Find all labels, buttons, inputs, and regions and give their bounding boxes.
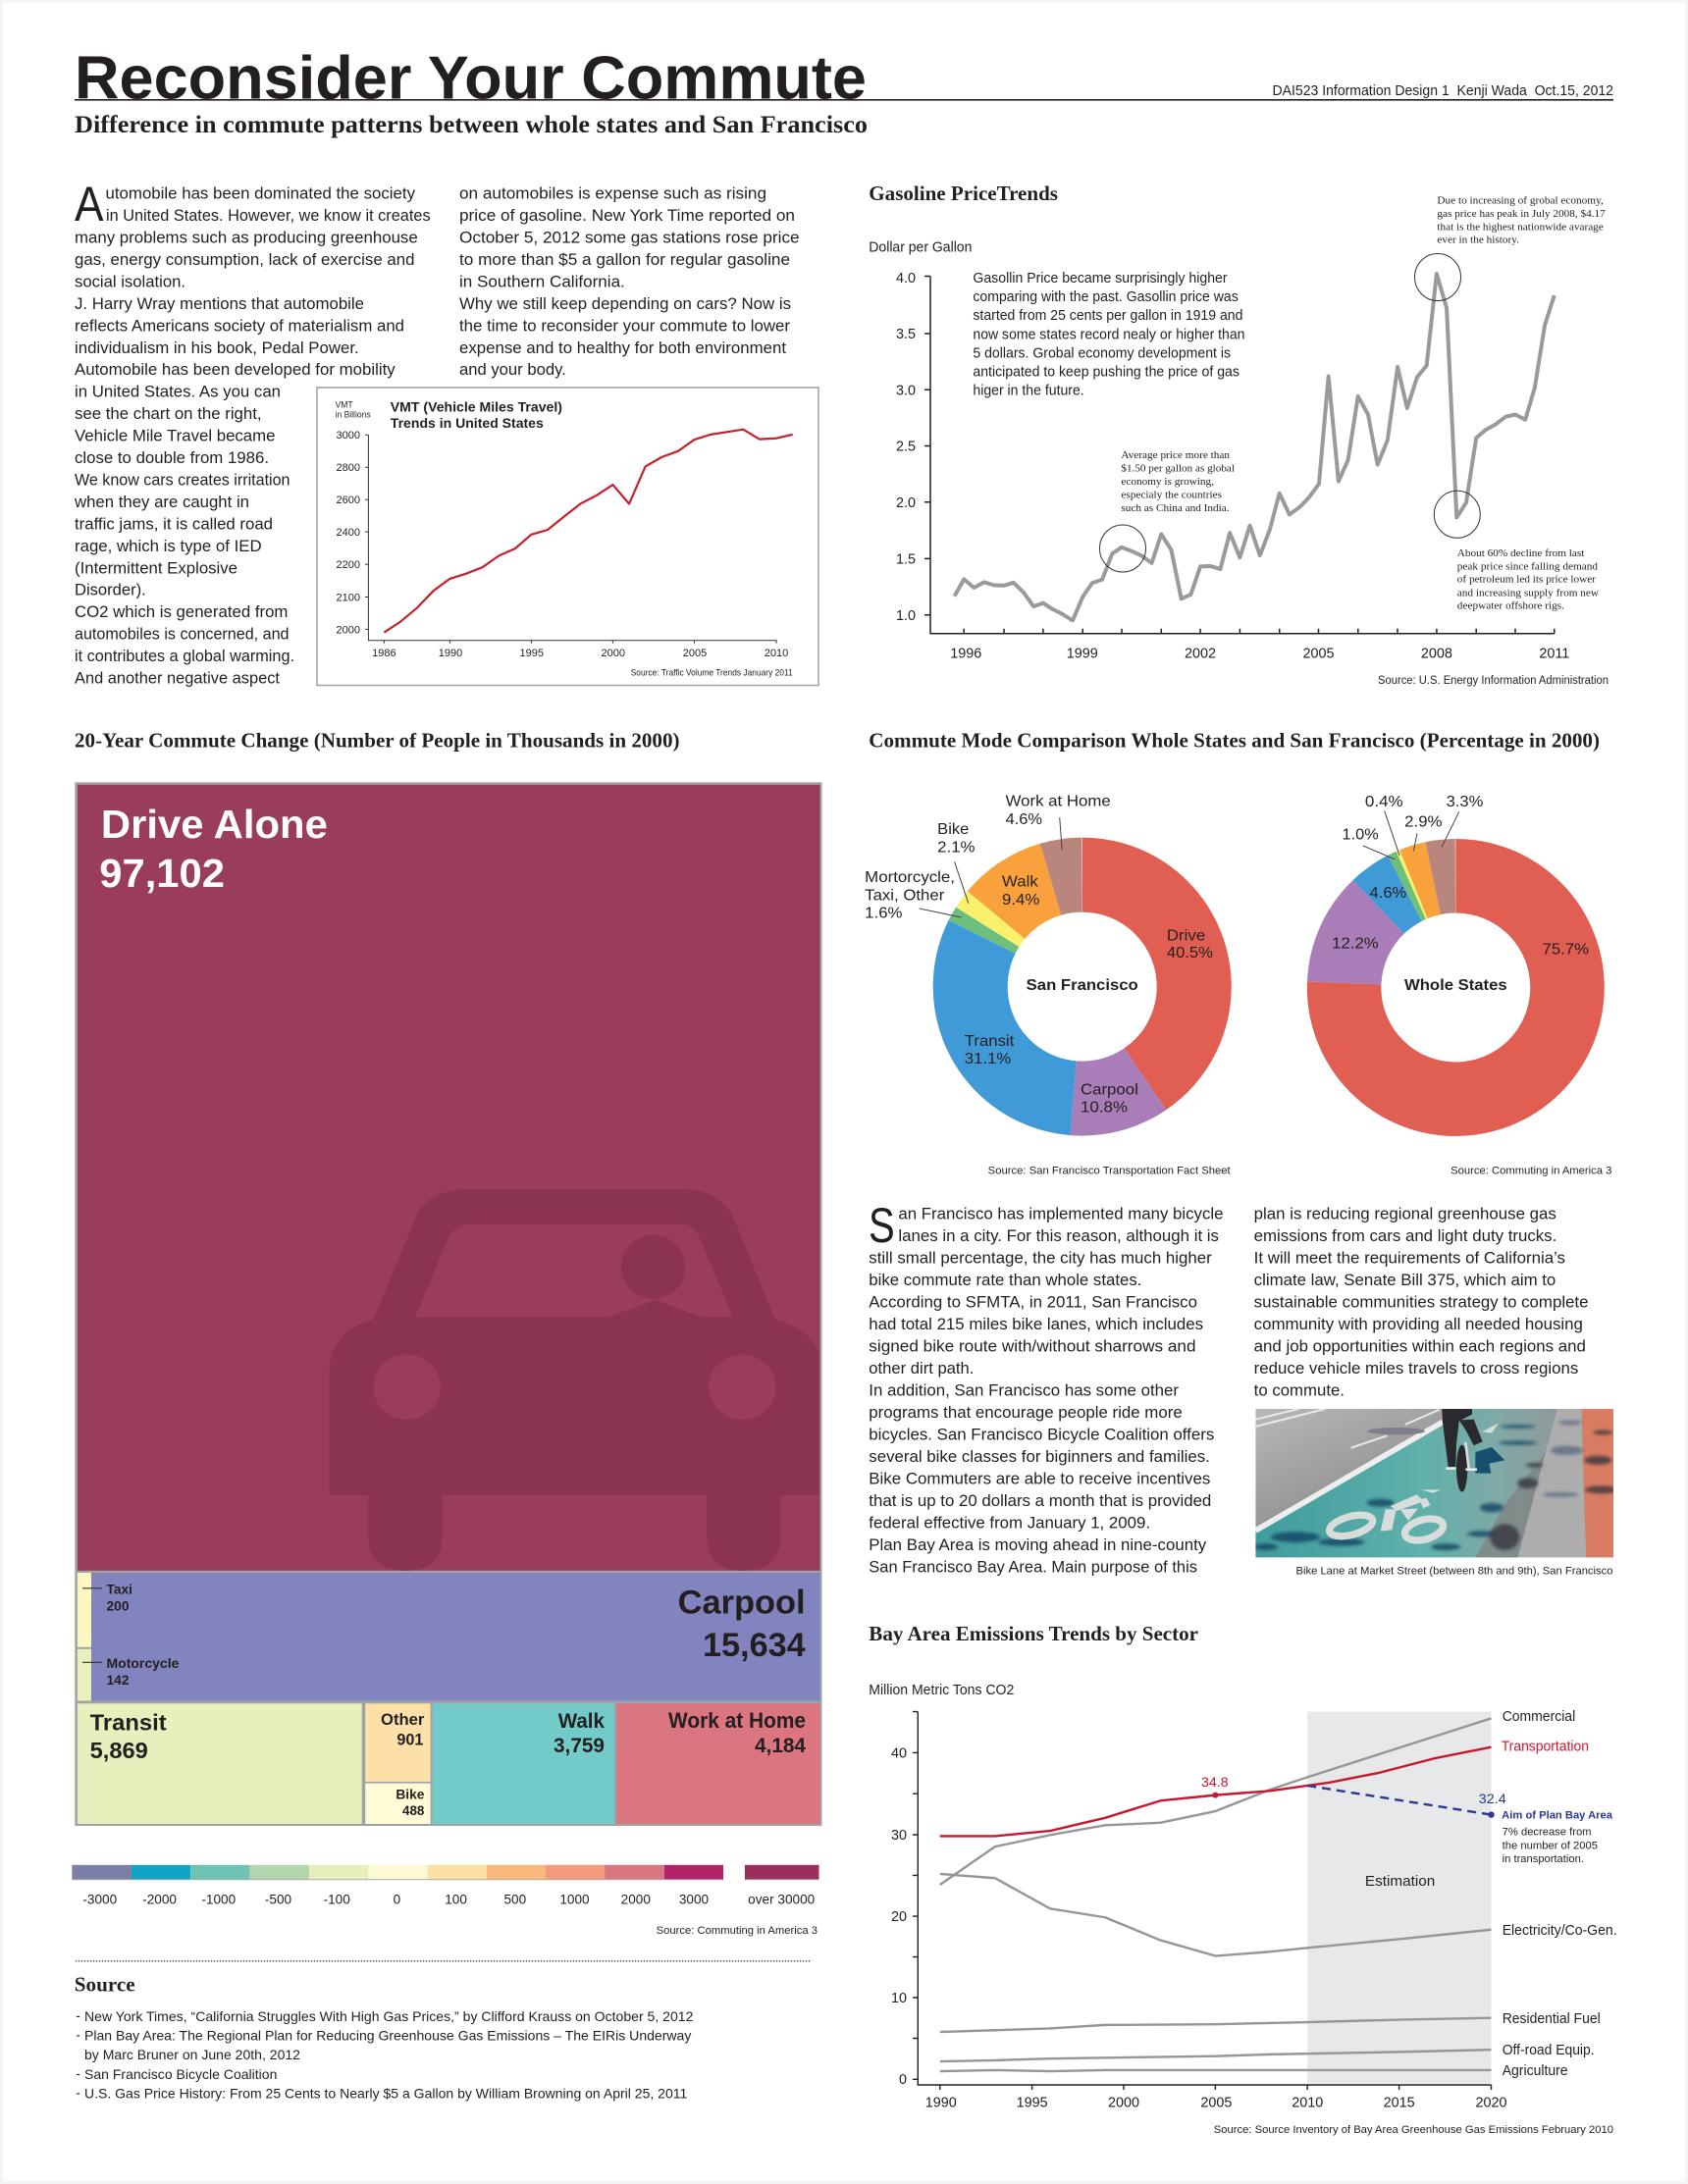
emissions axis unit: Million Metric Tons CO2: [869, 1683, 1014, 1698]
heading: source: Source: [75, 1972, 135, 1996]
icon: car: [330, 1189, 818, 1571]
intro text column 1: traffic jams, it is called road: [75, 515, 273, 533]
bike text column 1: federal effective from January 1, 2009.: [869, 1515, 1150, 1533]
whole states labels: 0.4%: [1365, 794, 1403, 810]
bike text column 2: sustainable communities strategy to complete: [1254, 1294, 1588, 1312]
value labels: 34.8: [1201, 1774, 1229, 1790]
legend labels: -3000: [82, 1892, 118, 1906]
intro text column 1: close to double from 1986.: [75, 449, 269, 467]
bike text column 1: Bike Commuters are able to receive incentives: [869, 1471, 1210, 1488]
drive alone label: [99, 802, 328, 896]
bike text column 2: community with providing all needed housing: [1254, 1316, 1583, 1333]
San Francisco labels: Work at Home: [1006, 794, 1111, 810]
whole states labels: 2.9%: [1404, 813, 1443, 830]
tile: walk: 3,759: [554, 1734, 605, 1757]
gasoline y labels: 4.0: [896, 271, 916, 286]
intro text column 1: And another negative aspect: [75, 669, 281, 687]
tile: taxi: 200: [106, 1599, 130, 1614]
VMT chart title: [391, 399, 562, 431]
intro text column 1: automobiles is concerned, and: [75, 626, 289, 644]
San Francisco labels: 1.6%: [865, 906, 903, 922]
emissions x labels: 1995: [1017, 2096, 1048, 2111]
donut chart: whole states: [1332, 794, 1589, 1099]
VMT y labels: 2000: [337, 624, 360, 636]
intro text column 1: (Intermittent Explosive: [75, 559, 237, 577]
intro text column 1: see the chart on the right,: [75, 405, 262, 423]
annotation: 2008 decline: and increasing supply from new: [1457, 588, 1599, 599]
VMT x labels: 1990: [439, 648, 462, 659]
bike text column 1: that is up to 20 dollars a month that is provided: [869, 1492, 1211, 1510]
annotation: 2008 peak: that is the highest nationwide avarage: [1437, 221, 1604, 233]
gasoline paragraph: [973, 271, 1244, 398]
legend labels: -2000: [142, 1892, 177, 1906]
source list: [76, 2008, 693, 2101]
panel: VMT trend chart: [317, 388, 818, 685]
intro text column 1: [74, 176, 431, 687]
Plan Bay Area note: the number of 2005: [1503, 1840, 1598, 1851]
VMT y labels: 2800: [337, 462, 360, 474]
VMT x labels: 1995: [520, 648, 544, 659]
VMT x labels: 2000: [602, 648, 625, 659]
gasoline x labels: [950, 646, 1569, 661]
source list: Plan Bay Area: The Regional Plan for Reducing Greenhouse Gas Emissions – The EIRis Underway: [84, 2029, 691, 2044]
VMT source: Source: Traffic Volume Trends January 2011: [631, 668, 793, 678]
bike text column 1: [869, 1198, 1223, 1577]
treemap source: Source: Commuting in America 3: [657, 1925, 818, 1937]
emissions x labels: 2010: [1292, 2096, 1323, 2111]
annotation: 2008 decline: peak price since falling demand: [1457, 561, 1599, 573]
Plan Bay Area note: 7% decrease from: [1503, 1827, 1592, 1839]
tile: transit: 5,869: [90, 1738, 148, 1763]
intro text column 1: CO2 which is generated from: [75, 603, 288, 621]
annotation: 2008 peak: Due to increasing of grobal economy,: [1437, 194, 1604, 206]
tile: walk: [433, 1703, 614, 1824]
subtitle: Difference in commute patterns between whole states and San Francisco: [75, 112, 868, 138]
sector lines: [940, 1718, 1491, 2071]
bike text column 2: plan is reducing regional greenhouse gas: [1254, 1206, 1556, 1223]
gasoline source: Source: U.S. Energy Information Administration: [1378, 675, 1609, 687]
gasoline paragraph: 5 dollars. Grobal economy development is: [973, 345, 1231, 361]
intro text column 1: rage, which is type of IED: [75, 538, 262, 555]
whole states labels: 75.7%: [1543, 941, 1589, 958]
emissions x labels: 2015: [1384, 2096, 1415, 2111]
transportation line: [940, 1747, 1491, 1836]
legend labels: [82, 1892, 816, 1906]
gasoline x labels: 2005: [1302, 646, 1335, 661]
bike text column 1: lanes in a city. For this reason, although it is: [898, 1227, 1219, 1245]
VMT chart title: VMT (Vehicle Miles Travel): [391, 399, 562, 414]
course credit: DAI523 Information Design 1 Kenji Wada Oct.15, 2012: [1272, 82, 1613, 99]
bike text column 1: bicycles. San Francisco Bicycle Coalition offers: [869, 1427, 1214, 1444]
legend labels: 100: [445, 1892, 467, 1906]
emissions source: Source: Source Inventory of Bay Area Greenhouse Gas Emissions February 2010: [1214, 2124, 1613, 2136]
San Francisco labels: Mortorcycle,: [865, 869, 955, 886]
tile: motorcycle: [78, 1649, 180, 1701]
value labels: [1201, 1774, 1506, 1806]
intro text column 1: gas, energy consumption, lack of exercise and: [75, 251, 414, 269]
emissions x labels: 2005: [1200, 2096, 1232, 2111]
intro text column 1: social isolation.: [75, 273, 185, 290]
treemap: commute change: [75, 782, 822, 1826]
gasoline y labels: 1.0: [896, 608, 916, 624]
source list: U.S. Gas Price History: From 25 Cents to Nearly $5 a Gallon by William Browning on April 25, 2011: [84, 2086, 687, 2101]
gasoline paragraph: now some states record nealy or higher than: [973, 327, 1244, 342]
point markers: [1212, 1793, 1495, 1818]
Plan Bay Area note: Aim of Plan Bay Area: [1502, 1810, 1613, 1822]
emissions x labels: 1990: [925, 2096, 957, 2111]
source list: -: [76, 2066, 80, 2081]
legend labels: over 30000: [748, 1892, 816, 1906]
VMT chart title: Trends in United States: [391, 416, 544, 431]
annotation: 2008 decline: of petroleum led its price lower: [1457, 574, 1596, 586]
gasoline x labels: 1999: [1067, 646, 1098, 661]
whole states labels: 1.0%: [1343, 826, 1379, 843]
bike text column 1: programs that encourage people ride more: [869, 1404, 1183, 1422]
emissions x labels: [925, 2096, 1507, 2111]
bike text column 2: and job opportunities within each regions and: [1254, 1338, 1586, 1356]
tile: other: [365, 1703, 431, 1782]
annotation: 2008 peak: ever in the history.: [1437, 234, 1519, 246]
San Francisco labels: [865, 794, 1213, 1117]
bike text column 2: [1254, 1206, 1588, 1400]
tile: carpool: Carpool: [678, 1584, 806, 1621]
VMT y labels: 2600: [337, 494, 360, 506]
intro text column 2: and your body.: [459, 361, 566, 379]
annotation: 2008 peak: gas price has peak in July 2008, $4.17: [1437, 208, 1606, 220]
emissions y labels: 0: [899, 2072, 907, 2088]
VMT y labels: 3000: [337, 430, 360, 442]
tile: drive alone: [78, 785, 819, 1571]
intro text column 1: in United States. However, we know it creates: [106, 207, 431, 225]
sector labels: Commercial: [1503, 1709, 1575, 1725]
gasoline axis unit: Dollar per Gallon: [869, 239, 972, 255]
VMT y labels: [337, 430, 360, 636]
intro text column 1: utomobile has been dominated the society: [106, 185, 416, 203]
bike text column 1: signed bike route with/without sharrows and: [869, 1338, 1195, 1356]
VMT x labels: 1986: [372, 648, 396, 659]
bike text column 1: Plan Bay Area is moving ahead in nine-county: [869, 1536, 1207, 1554]
legend labels: 1000: [559, 1892, 590, 1906]
tile: work at home: Work at Home: [668, 1708, 806, 1733]
annotation: 2008 decline: [1457, 547, 1599, 612]
gasoline y labels: 3.0: [896, 383, 916, 398]
source list: -: [76, 2008, 80, 2023]
bike text column 2: It will meet the requirements of California’s: [1254, 1250, 1565, 1268]
sector labels: Residential Fuel: [1503, 2011, 1601, 2027]
VMT x labels: 2005: [683, 648, 707, 659]
estimation label: Estimation: [1365, 1873, 1435, 1890]
drive alone label: Drive Alone: [101, 802, 328, 847]
tile: transit: [78, 1703, 362, 1824]
intro text column 2: to more than $5 a gallon for regular gasoline: [459, 251, 790, 269]
bike text column 1: had total 215 miles bike lanes, which includes: [869, 1316, 1203, 1333]
legend labels: 2000: [621, 1892, 651, 1906]
gasoline y labels: [896, 271, 916, 624]
emissions x labels: 2000: [1108, 2096, 1139, 2111]
sector labels: Electricity/Co-Gen.: [1503, 1923, 1617, 1939]
bike text column 2: emissions from cars and light duty trucks.: [1254, 1227, 1556, 1245]
bike text column 1: In addition, San Francisco has some other: [869, 1382, 1180, 1400]
tile: motorcycle: Motorcycle: [106, 1656, 180, 1671]
gasoline paragraph: Gasollin Price became surprisingly higher: [973, 271, 1228, 286]
emissions axes: [913, 1712, 1492, 2090]
tile: walk: Walk: [558, 1709, 605, 1733]
bike text column 2: reduce vehicle miles travels to cross regions: [1254, 1360, 1578, 1378]
Plan Bay Area dashed target: [1307, 1786, 1492, 1815]
annotation: 2000 rise: Average price more than: [1121, 449, 1231, 461]
tile: bike: Bike: [396, 1786, 425, 1801]
circle highlights: [1099, 253, 1480, 572]
bike text column 1: other dirt path.: [869, 1360, 974, 1378]
photo caption: Bike Lane at Market Street (between 8th and 9th), San Francisco: [1295, 1566, 1613, 1578]
emissions y labels: 30: [891, 1828, 907, 1844]
chart: gasoline price: [896, 194, 1609, 687]
annotation: 2008 decline: About 60% decline from last: [1457, 547, 1584, 559]
intro text column 1: J. Harry Wray mentions that automobile: [75, 295, 364, 313]
intro text column 1: individualism in his book, Pedal Power.: [75, 339, 359, 357]
donut source: whole states: Source: Commuting in America 3: [1451, 1166, 1611, 1177]
San Francisco labels: 31.1%: [965, 1051, 1011, 1067]
intro text column 2: on automobiles is expense such as rising: [459, 185, 766, 203]
San Francisco labels: 2.1%: [937, 839, 976, 856]
San Francisco leader lines: [920, 817, 1062, 917]
VMT axes: [365, 435, 777, 644]
San Francisco labels: Carpool: [1081, 1082, 1138, 1099]
bike text column 1: According to SFMTA, in 2011, San Francisco: [869, 1294, 1197, 1312]
legend labels: -500: [265, 1892, 292, 1906]
emissions y labels: 20: [891, 1909, 907, 1925]
emissions y labels: 10: [891, 1991, 907, 2006]
gasoline y labels: 2.0: [896, 495, 916, 511]
annotation: 2000 rise: especialy the countries: [1121, 489, 1222, 500]
tile: carpool: 15,634: [703, 1627, 806, 1664]
donut chart: San Francisco: [865, 794, 1213, 1117]
bike text column 2: to commute.: [1254, 1382, 1345, 1400]
heading: commute mode comparison: Commute Mode Comparison Whole States and San Francisco (Percentage in 2000): [869, 729, 1600, 753]
estimation band: [1307, 1712, 1492, 2084]
bike text column 1: bike commute rate than whole states.: [869, 1272, 1141, 1289]
bike text column 1: S: [869, 1198, 895, 1253]
heading: gasoline: Gasoline PriceTrends: [869, 182, 1058, 205]
value labels: 32.4: [1479, 1791, 1506, 1806]
VMT axis unit: in Billions: [336, 410, 371, 420]
heading: emissions: Bay Area Emissions Trends by Sector: [869, 1622, 1198, 1645]
sector labels: Off-road Equip.: [1503, 2043, 1595, 2058]
legend labels: 500: [503, 1892, 527, 1906]
legend labels: -100: [324, 1892, 350, 1906]
gasoline paragraph: comparing with the past. Gasollin price was: [973, 289, 1239, 305]
emissions y labels: 40: [891, 1746, 907, 1762]
whole states labels: 3.3%: [1447, 794, 1483, 810]
bike text column 1: still small percentage, the city has much higher: [869, 1250, 1212, 1268]
gasoline x labels: 2002: [1185, 646, 1216, 661]
gasoline price line: [955, 274, 1555, 620]
source list: -: [76, 2028, 80, 2043]
tile: other: Other: [381, 1710, 425, 1729]
tile: bike: [365, 1784, 431, 1824]
gasoline y labels: 1.5: [896, 551, 916, 567]
VMT axis unit: VMT: [336, 400, 353, 410]
sector labels: Transportation: [1502, 1740, 1589, 1755]
VMT y labels: 2200: [337, 559, 360, 571]
San Francisco labels: Transit: [965, 1033, 1015, 1050]
San Francisco centre label: San Francisco: [1027, 977, 1138, 994]
VMT y labels: 2400: [337, 527, 360, 539]
legend labels: 3000: [679, 1892, 710, 1906]
intro text column 1: Disorder).: [75, 582, 146, 599]
intro text column 2: price of gasoline. New York Time reported on: [459, 207, 795, 225]
annotation: 2000 rise: $1.50 per gallon as global: [1121, 463, 1235, 475]
intro text column 1: Vehicle Mile Travel became: [75, 428, 275, 445]
intro text column 2: the time to reconsider your commute to lower: [459, 317, 791, 335]
San Francisco labels: 4.6%: [1006, 811, 1042, 828]
gasoline paragraph: anticipated to keep pushing the price of gas: [973, 364, 1240, 380]
intro text column 1: in United States. As you can: [75, 384, 281, 401]
whole states labels: [1332, 794, 1589, 958]
intro text column 2: in Southern California.: [459, 273, 625, 290]
VMT axis unit: [336, 400, 371, 420]
source list: by Marc Bruner on June 20th, 2012: [84, 2048, 300, 2062]
bike text column 1: several bike classes for biginners and families.: [869, 1448, 1210, 1466]
whole states leader lines: [1363, 811, 1459, 859]
gasoline paragraph: started from 25 cents per gallon in 1919 and: [973, 308, 1242, 324]
gasoline x labels: 2008: [1421, 646, 1452, 661]
legend labels: 0: [394, 1892, 401, 1906]
intro text column 1: it contributes a global warming.: [75, 648, 294, 665]
intro text column 1: many problems such as producing greenhouse: [75, 230, 418, 247]
sector labels: [1502, 1709, 1617, 2079]
tile: work at home: [616, 1703, 820, 1824]
annotation: 2000 rise: economy is growing,: [1121, 476, 1214, 488]
photo: bike lane: [1254, 1409, 1617, 1557]
gasoline x labels: 1996: [950, 646, 981, 661]
San Francisco labels: Bike: [937, 821, 969, 838]
emissions y labels: [891, 1746, 907, 2088]
source list: San Francisco Bicycle Coalition: [84, 2067, 277, 2082]
gasoline paragraph: higer in the future.: [973, 383, 1084, 398]
San Francisco labels: Walk: [1002, 874, 1039, 891]
whole states labels: 12.2%: [1332, 936, 1379, 953]
tile: motorcycle: 142: [106, 1673, 130, 1688]
VMT y labels: 2100: [337, 593, 360, 604]
bike text column 2: climate law, Senate Bill 375, which aim to: [1254, 1272, 1556, 1289]
bike text column 1: an Francisco has implemented many bicycle: [898, 1206, 1223, 1223]
Plan Bay Area note: in transportation.: [1503, 1853, 1584, 1865]
San Francisco labels: 10.8%: [1081, 1100, 1128, 1117]
annotation: 2008 decline: deepwater offshore rigs.: [1457, 600, 1564, 612]
heading: 20-year change: 20-Year Commute Change (Number of People in Thousands in 2000): [75, 728, 679, 752]
Plan Bay Area note: [1502, 1810, 1613, 1865]
intro text column 1: Automobile has been developed for mobility: [75, 361, 396, 379]
tile: other: 901: [396, 1730, 423, 1748]
intro text column 1: when they are caught in: [74, 494, 249, 511]
San Francisco labels: 40.5%: [1167, 945, 1213, 962]
whole states labels: 4.6%: [1370, 885, 1406, 902]
gasoline x labels: 2011: [1539, 646, 1569, 661]
San Francisco labels: 9.4%: [1002, 892, 1039, 909]
tile: work at home: 4,184: [755, 1734, 806, 1757]
San Francisco labels: Taxi, Other: [865, 887, 945, 904]
intro text column 2: October 5, 2012 some gas stations rose price: [459, 230, 800, 247]
source list: New York Times, “California Struggles With High Gas Prices,” by Clifford Krauss on October 5, 2012: [84, 2009, 693, 2024]
tile: taxi: [78, 1573, 132, 1647]
annotation: 2000 rise: [1121, 449, 1235, 514]
annotation: 2008 peak: [1437, 194, 1606, 246]
gasoline y labels: 3.5: [896, 327, 916, 342]
annotation: 2000 rise: such as China and India.: [1121, 502, 1230, 514]
bike text column 1: San Francisco Bay Area. Main purpose of this: [869, 1559, 1197, 1577]
legend: colour scale: [72, 1865, 819, 1906]
San Francisco labels: Drive: [1167, 927, 1205, 944]
tile: taxi: Taxi: [106, 1582, 132, 1597]
emissions x labels: 2020: [1475, 2096, 1507, 2111]
intro text column 2: [459, 185, 800, 379]
drive alone label: 97,102: [99, 851, 225, 896]
intro text column 1: We know cars creates irritation: [75, 471, 290, 489]
intro text column 1: reflects Americans society of materialism and: [75, 317, 404, 335]
VMT x labels: [372, 648, 788, 659]
title: Reconsider Your Commute: [75, 45, 867, 112]
VMT line: [384, 430, 793, 633]
tile: bike: 488: [402, 1802, 425, 1818]
intro text column 2: Why we still keep depending on cars? Now is: [459, 295, 791, 313]
source list: -: [76, 2085, 80, 2100]
gasoline y labels: 2.5: [896, 440, 916, 455]
legend labels: -1000: [201, 1892, 237, 1906]
whole states centre label: Whole States: [1404, 977, 1507, 994]
chart: emissions by sector: [891, 1709, 1617, 2111]
donut source: San Francisco: Source: San Francisco Transportation Fact Sheet: [988, 1166, 1231, 1177]
tile: carpool: [91, 1573, 820, 1701]
tile: transit: Transit: [90, 1709, 167, 1735]
intro text column 2: expense and to healthy for both environment: [459, 339, 787, 357]
gasoline axes: [924, 277, 1555, 634]
intro text column 1: A: [75, 176, 104, 232]
sector labels: Agriculture: [1503, 2063, 1568, 2079]
VMT x labels: 2010: [765, 648, 788, 659]
